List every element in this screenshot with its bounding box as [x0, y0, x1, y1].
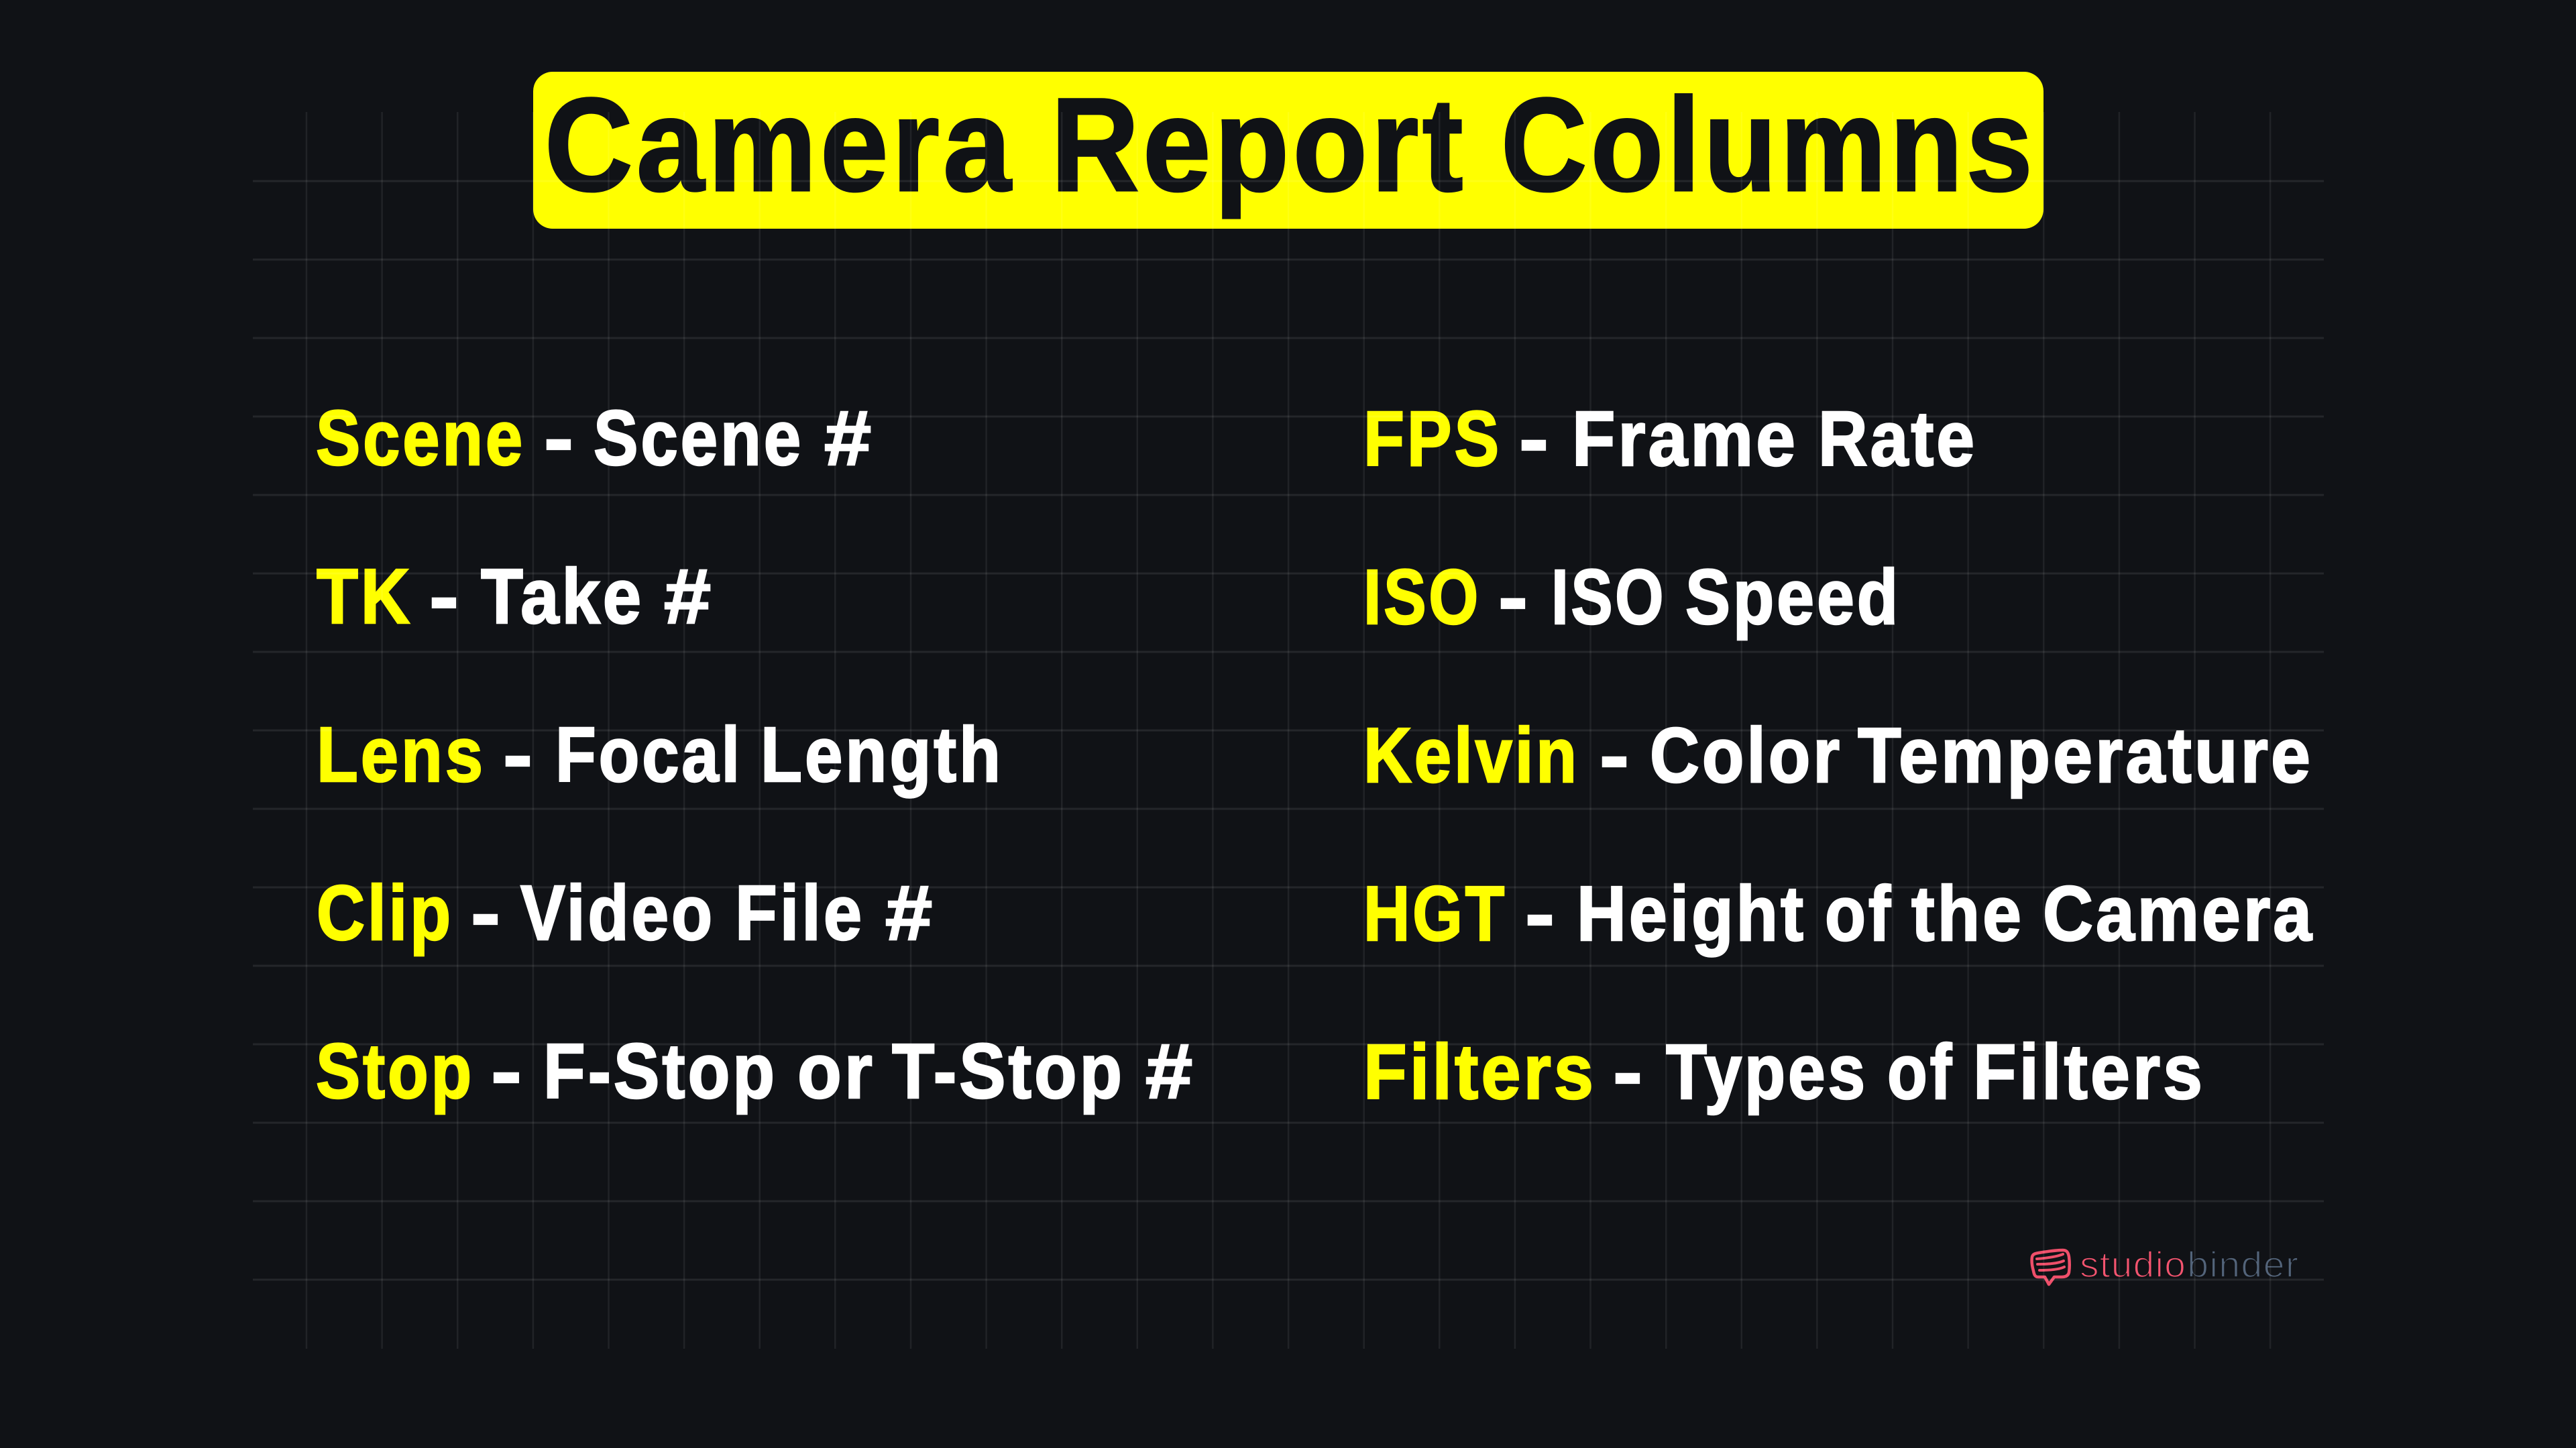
row: Clip: File: [735, 869, 864, 956]
row: HGT: Camera: [2043, 870, 2314, 957]
row: FPS: -: [1519, 395, 1549, 482]
row: HGT: HGT: [1363, 870, 1507, 957]
row: Kelvin: [1363, 712, 2313, 799]
row: Stop: or: [797, 1027, 875, 1115]
row: TK: [317, 553, 711, 640]
row: TK: TK: [317, 553, 412, 640]
title text: Camera: [545, 70, 1015, 219]
row: Stop: -: [491, 1027, 522, 1115]
row: ISO: ISO: [1551, 553, 1666, 641]
row: TK: Take: [481, 553, 644, 640]
row: TK: #: [664, 553, 711, 640]
row: Lens: [317, 711, 1003, 798]
row: Lens: Length: [761, 711, 1003, 798]
row: Scene: Scene: [594, 394, 803, 482]
title text: Report: [1051, 70, 1467, 219]
row: Filters: [1363, 1028, 2205, 1115]
row: Filters: of: [1887, 1028, 1954, 1115]
row: Scene: [316, 394, 871, 482]
title text: Columns: [1501, 70, 2036, 219]
row: HGT: the: [1911, 870, 2024, 957]
row: Kelvin: -: [1600, 712, 1629, 799]
row: ISO: [1363, 553, 1901, 641]
row: Filters: Filters: [1973, 1028, 2205, 1115]
StudioBinder logo: [2032, 1245, 2299, 1285]
row: HGT: of: [1825, 870, 1893, 957]
row: Filters: Filters: [1363, 1028, 1596, 1115]
row: Clip: Clip: [317, 869, 453, 956]
row: Clip: #: [885, 869, 932, 956]
row: Lens: Focal: [555, 711, 742, 798]
row: Clip: -: [471, 869, 500, 956]
row: FPS: [1363, 395, 1977, 482]
row: Kelvin: Color: [1650, 712, 1842, 799]
row: Stop: T-Stop: [892, 1027, 1125, 1115]
row: ISO: Speed: [1685, 553, 1901, 641]
row: Filters: Types: [1666, 1028, 1868, 1115]
row: HGT: -: [1525, 870, 1555, 957]
row: Stop: Stop: [316, 1027, 474, 1115]
right column: [1363, 395, 2314, 1115]
row: ISO: ISO: [1363, 553, 1481, 641]
row: Stop: [316, 1027, 1192, 1115]
row: Kelvin: Kelvin: [1363, 712, 1579, 799]
row: FPS: FPS: [1363, 395, 1502, 482]
row: Clip: [317, 869, 932, 956]
title banner: [533, 70, 2043, 229]
row: Kelvin: Temperature: [1858, 712, 2313, 799]
logo wordmark: binder: [2187, 1245, 2299, 1285]
row: Lens: -: [503, 711, 533, 798]
row: Scene: #: [824, 394, 871, 482]
icon: speech bubble: [2032, 1250, 2070, 1284]
row: Clip: Video: [520, 869, 715, 956]
row: FPS: Frame: [1572, 395, 1798, 482]
row: ISO: -: [1498, 553, 1528, 641]
row: TK: -: [429, 553, 459, 640]
row: HGT: [1363, 870, 2314, 957]
logo wordmark: studio: [2080, 1245, 2186, 1285]
left column: [316, 394, 1192, 1115]
row: Scene: -: [544, 394, 573, 482]
row: HGT: Height: [1577, 870, 1806, 957]
row: Scene: Scene: [316, 394, 525, 482]
row: FPS: Rate: [1818, 395, 1977, 482]
row: Stop: #: [1145, 1027, 1192, 1115]
row: Filters: -: [1613, 1028, 1642, 1115]
row: Stop: F-Stop: [543, 1027, 777, 1115]
row: Lens: Lens: [317, 711, 486, 798]
